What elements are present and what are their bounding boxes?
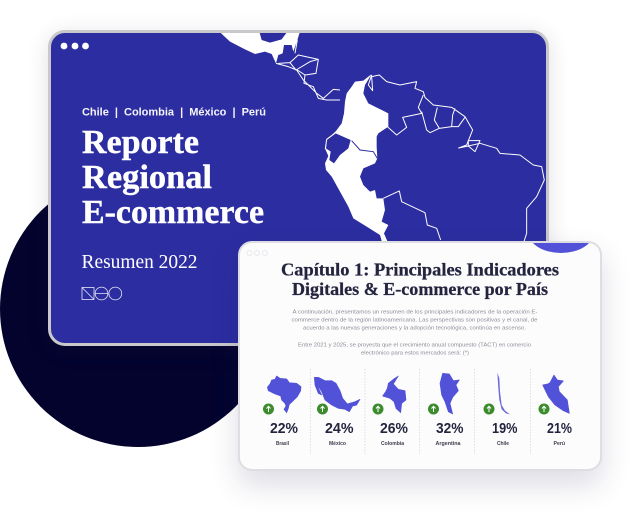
- stat: Brasil: Brasil: [276, 441, 290, 447]
- panel: blue cover card: [48, 30, 549, 346]
- stat: México: México: [329, 441, 346, 447]
- text: intro paragraph: electrónico para estos mercados será: (*): [361, 350, 469, 356]
- heading: report title: E-commerce: [82, 194, 264, 231]
- logo: NEO: [82, 287, 122, 300]
- heading: chapter title: Digitales & E-commerce por País: [292, 279, 548, 299]
- stat: Argentina: 32%: [436, 421, 464, 437]
- map: Colombia and Peru: [325, 74, 388, 243]
- stat: Perú: Perú: [554, 441, 565, 447]
- dots: window controls outline: [247, 250, 268, 256]
- stat: México: [314, 377, 360, 447]
- stat: Chile: [484, 373, 518, 447]
- stat: Colombia: [372, 376, 408, 447]
- stat: Perú: 21%: [547, 421, 572, 437]
- map of Latin America: [219, 32, 544, 243]
- stat: Colombia: Colombia: [381, 441, 404, 447]
- stat: Chile: 19%: [492, 421, 518, 437]
- text: countries: Chile | Colombia | México | Perú: [82, 106, 266, 118]
- stat: Argentina: [428, 373, 464, 447]
- text: intro paragraph: commerce dentro de la región latinoamericana. Las perspectivas son positivas y el canal, de: [292, 318, 538, 324]
- accent: purple half ellipse: [528, 211, 594, 253]
- heading: chapter title: [281, 260, 559, 299]
- dark background circle: [0, 171, 276, 447]
- stat: Brasil: [263, 376, 301, 447]
- stat: Perú: [538, 375, 572, 447]
- text: intro paragraph: [292, 310, 538, 356]
- text: summary year: Resumen 2022: [82, 251, 198, 273]
- text: intro paragraph: acuerdo a las nuevas generaciones y la adopción tecnológica, continúa en ascenso.: [303, 326, 526, 332]
- map: Venezuela, Guianas and Brazil borders: [368, 75, 544, 242]
- heading: chapter title: Capítulo 1: Principales Indicadores: [281, 260, 559, 280]
- stat: Chile: Chile: [497, 441, 509, 447]
- text: intro paragraph: A continuación, presentamos un resumen de los principales indicadores de la operación E-: [292, 310, 538, 316]
- heading: report title: Regional: [82, 159, 212, 196]
- stat: Argentina: Argentina: [436, 441, 461, 447]
- heading: report title: Reporte: [82, 124, 199, 161]
- map: Mexico and Central America: [219, 32, 340, 100]
- stat: México: 24%: [325, 421, 354, 437]
- stat: Brasil: 22%: [270, 421, 298, 437]
- dots: window controls: [61, 43, 89, 49]
- stat: Colombia: 26%: [380, 421, 408, 437]
- panel: white chapter card: [238, 241, 602, 471]
- text: intro paragraph: Entre 2021 y 2025, se proyecta que el crecimiento anual compuesto (TACT) en comercio: [298, 342, 531, 348]
- heading: report title: [82, 124, 264, 231]
